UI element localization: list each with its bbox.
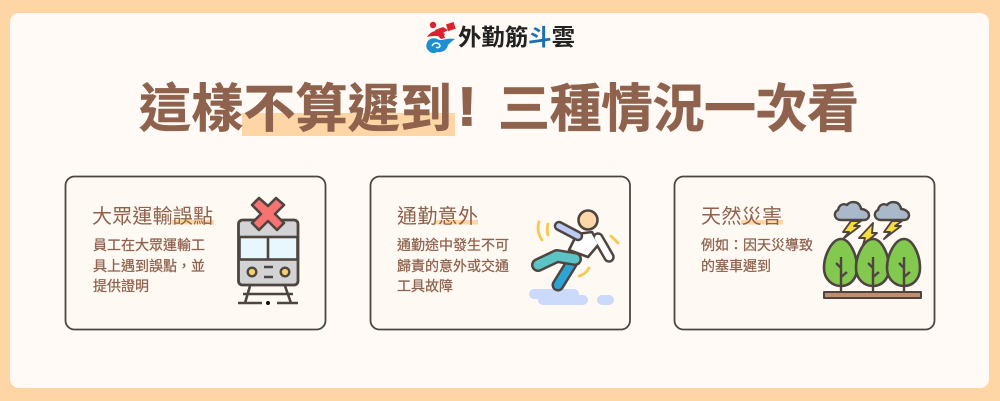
text block: transport description: 具上遇到誤點，並 (93, 258, 205, 274)
heading: 通勤意外: 通勤意外 (397, 205, 478, 228)
logo (426, 22, 575, 53)
panel: public transport delay (66, 176, 326, 330)
heading: 天然災害: 天然災害 (701, 205, 782, 228)
heading: 大眾運輸誤點: 大眾運輸誤點 (92, 205, 213, 228)
icon: person slipping (529, 210, 618, 305)
icon: storm and trees (824, 202, 921, 298)
heading highlight (172, 220, 214, 224)
text block: transport description: 提供證明 (93, 278, 149, 294)
text block: accident description: 歸責的意外或交通 (397, 258, 509, 274)
title: ! (458, 77, 476, 137)
text block: transport description: 員工在大眾運輸工 (93, 237, 205, 253)
logo wordmark: 外勤筋斗雲 (458, 24, 575, 50)
heading highlight (436, 220, 478, 224)
title highlight (242, 113, 455, 136)
text block: accident description: 通勤途中發生不可 (397, 237, 509, 253)
text block: disaster description: 例如：因天災導致 (701, 237, 813, 253)
panel: natural disaster (674, 176, 934, 330)
icon: logo mascot (426, 22, 456, 53)
title: 這樣不算遲到 (139, 81, 452, 139)
heading highlight (741, 220, 783, 224)
title: 三種情況一次看 (498, 81, 859, 139)
panel: commuting accident (370, 176, 630, 330)
icon: train with cross (238, 198, 298, 305)
text block: accident description: 工具故障 (397, 278, 453, 294)
title (139, 77, 859, 139)
text block: disaster description: 的塞車遲到 (701, 258, 771, 274)
